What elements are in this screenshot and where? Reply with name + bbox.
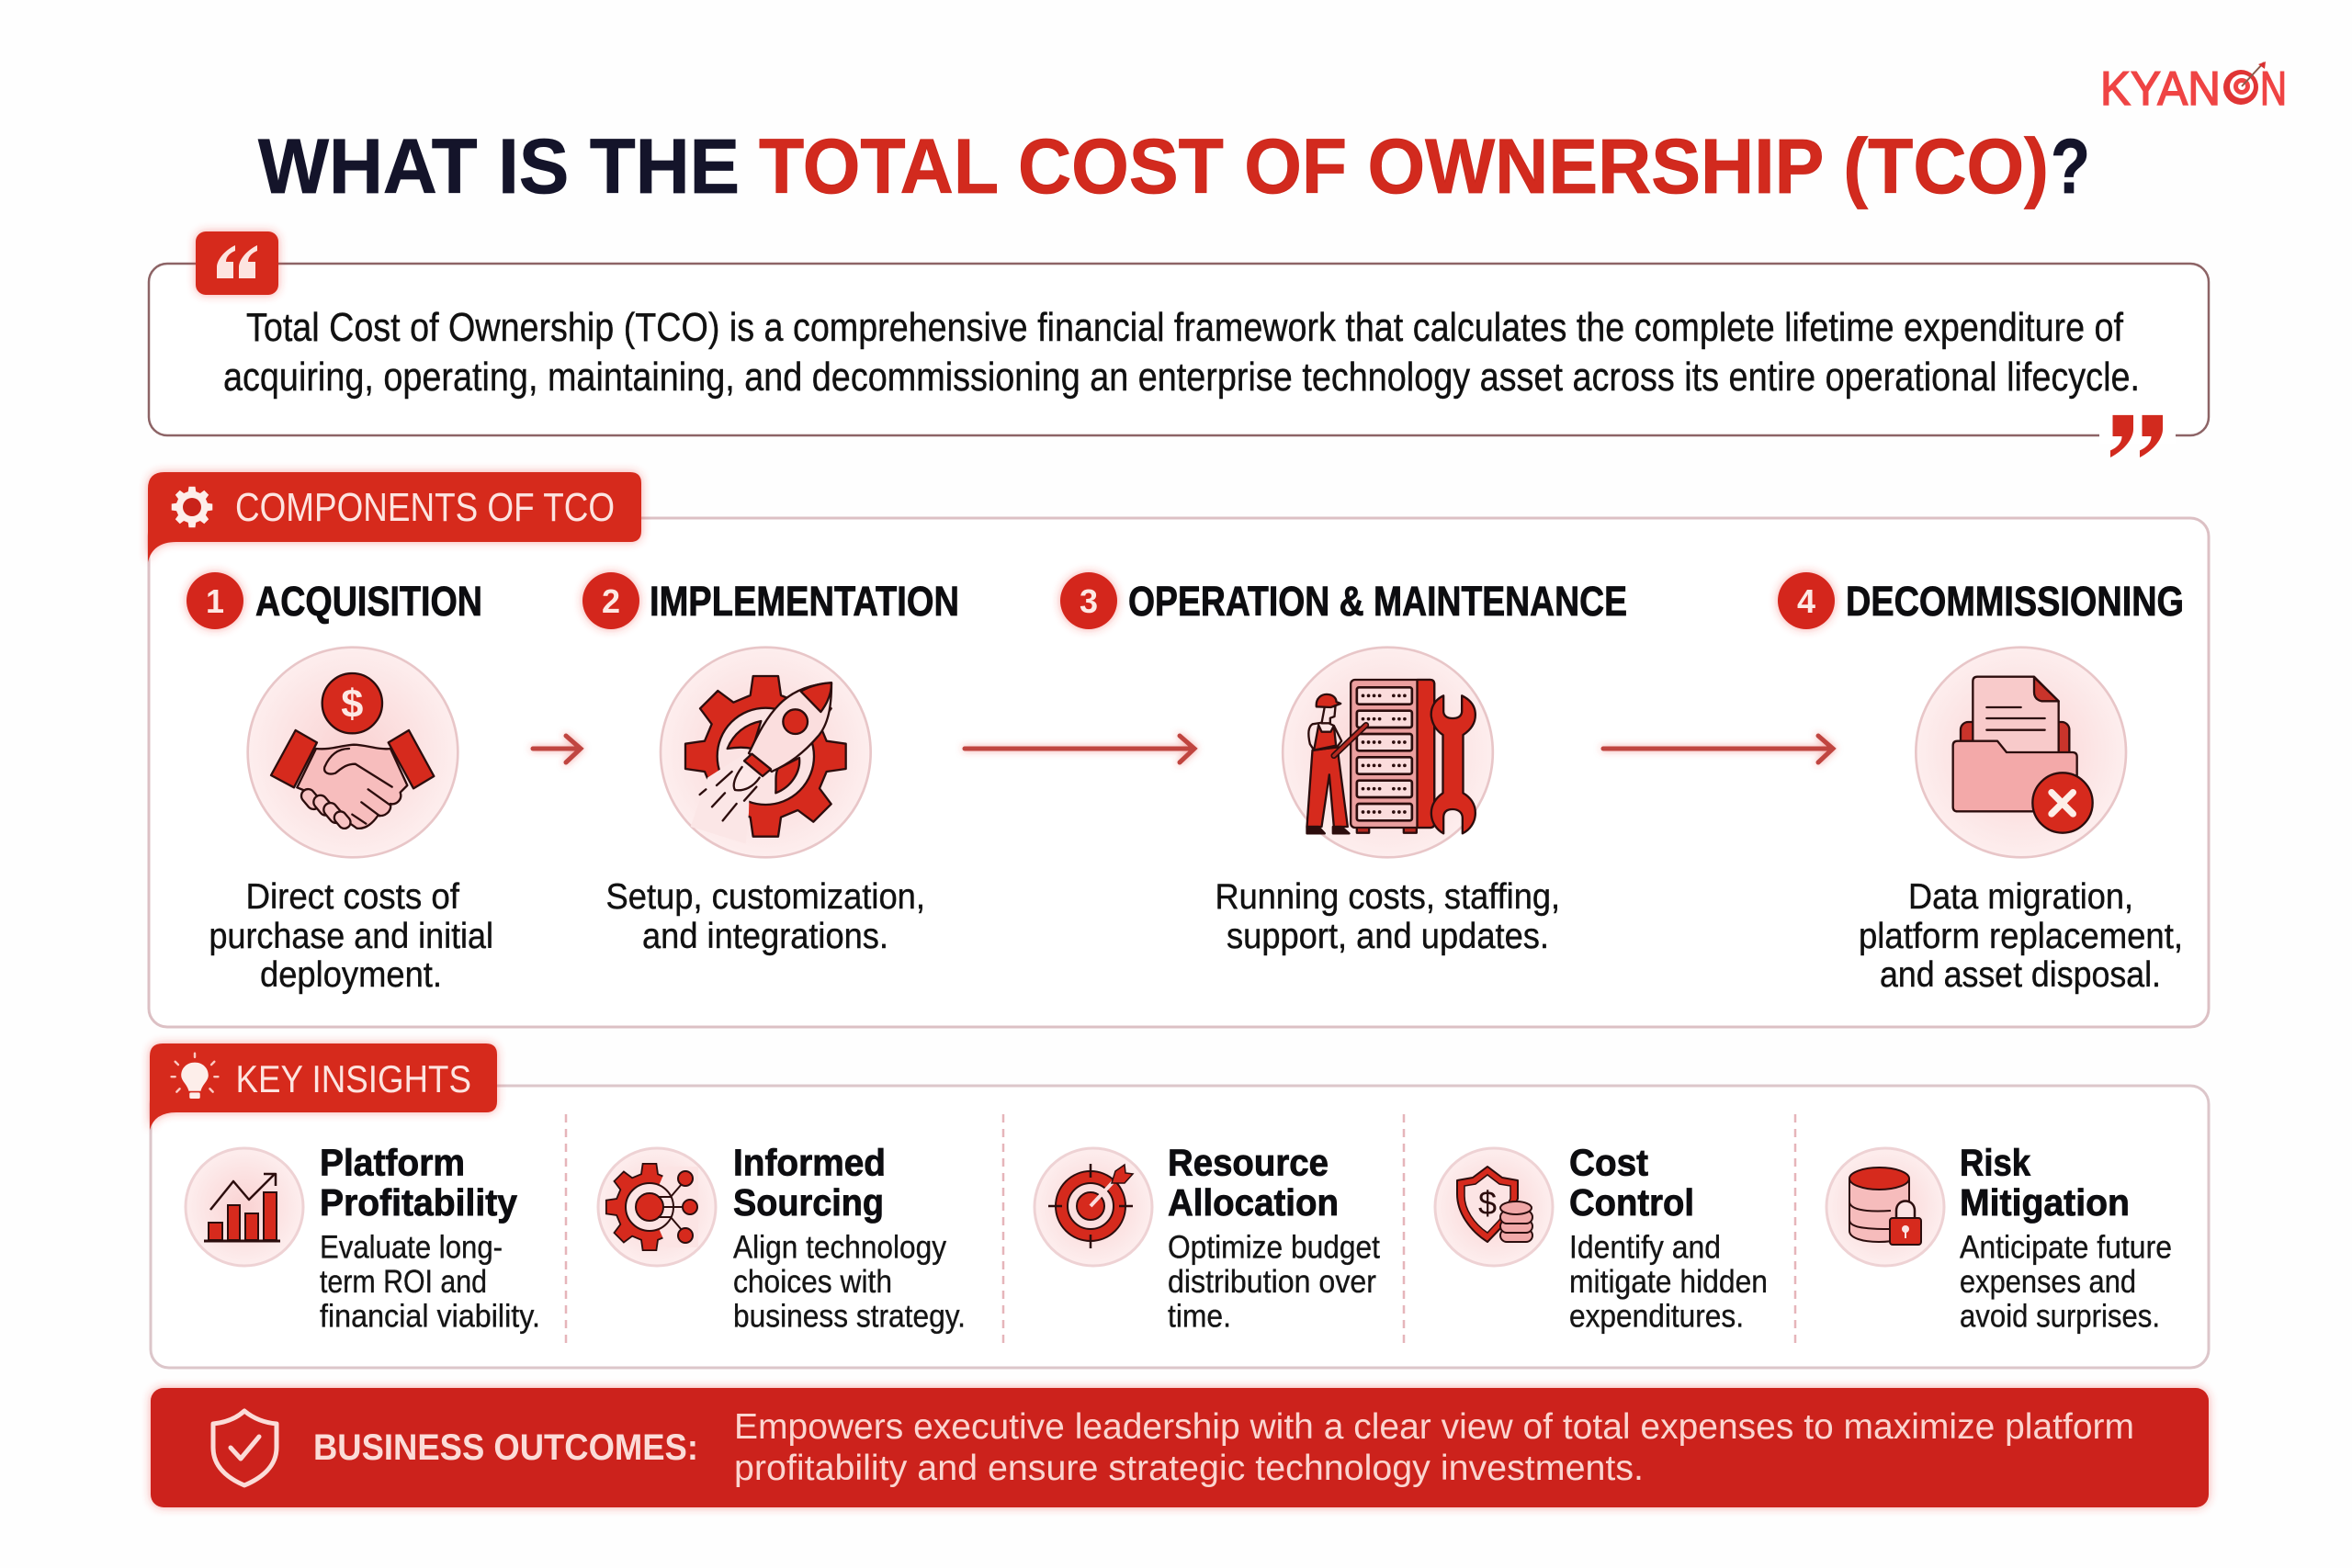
step 2: implementation bbox=[582, 572, 959, 956]
panel: key insights bbox=[150, 1043, 2209, 1368]
step 4: decommissioning: Data migration, bbox=[1908, 877, 2133, 917]
icon: target with arrow bbox=[1048, 1164, 1133, 1248]
insight: risk mitigation: Risk bbox=[1960, 1141, 2030, 1183]
icon: gear with network nodes bbox=[606, 1164, 698, 1250]
insight: informed sourcing bbox=[598, 1141, 966, 1334]
icon: shield with coins bbox=[1457, 1167, 1532, 1242]
icon: handshake bbox=[248, 648, 458, 857]
insight: resource allocation: Optimize budget bbox=[1168, 1229, 1380, 1266]
insight: platform profitability: Platform bbox=[320, 1141, 465, 1183]
insight: risk mitigation: Mitigation bbox=[1960, 1181, 2130, 1224]
icon: closing quote bbox=[2110, 415, 2163, 457]
step 1: acquisition: 1 bbox=[206, 582, 224, 620]
step 4: decommissioning: and asset disposal. bbox=[1880, 955, 2161, 995]
icon: opening quote tab bbox=[196, 231, 278, 295]
step 4: decommissioning bbox=[1778, 572, 2184, 995]
icon: database with padlock bbox=[1849, 1168, 1921, 1245]
definition text bbox=[223, 305, 2140, 400]
arrow: step 2 to step 3 bbox=[965, 736, 1194, 762]
insight: risk mitigation: avoid surprises. bbox=[1960, 1299, 2160, 1334]
step 2: implementation: 2 bbox=[602, 582, 620, 620]
insight: informed sourcing: Align technology bbox=[733, 1229, 946, 1266]
insight: risk mitigation: Anticipate future bbox=[1960, 1229, 2172, 1266]
logo: Kyanon: N bbox=[2260, 62, 2287, 116]
insight: informed sourcing: choices with bbox=[733, 1264, 892, 1300]
section tab: components: COMPONENTS OF TCO bbox=[235, 485, 615, 530]
step 3: operation and maintenance: 3 bbox=[1080, 582, 1098, 620]
step 3: operation and maintenance: OPERATION & MAINTENANCE bbox=[1128, 578, 1627, 625]
logo: Kyanon bbox=[2100, 62, 2287, 116]
arrow: step 1 to step 2 bbox=[533, 736, 581, 762]
step 3: operation and maintenance: support, and updates. bbox=[1227, 917, 1549, 956]
step 1: acquisition: Direct costs of bbox=[246, 877, 459, 917]
step 1: acquisition: purchase and initial bbox=[209, 917, 493, 956]
arrow: step 3 to step 4 bbox=[1603, 736, 1833, 762]
insight: informed sourcing: business strategy. bbox=[733, 1299, 966, 1334]
insight: platform profitability bbox=[186, 1141, 540, 1334]
step 3: operation and maintenance bbox=[1060, 572, 1627, 956]
insight: resource allocation: distribution over bbox=[1168, 1264, 1376, 1300]
icon: shield with check bbox=[213, 1411, 277, 1485]
insight: resource allocation: Allocation bbox=[1168, 1181, 1339, 1224]
title: ? bbox=[2051, 123, 2090, 209]
icon: light bulb bbox=[172, 1054, 218, 1099]
step 1: acquisition bbox=[187, 572, 493, 995]
icon: shield with coins: $ bbox=[1478, 1184, 1497, 1222]
logo: Kyanon: KYAN bbox=[2100, 62, 2221, 116]
insight: resource allocation bbox=[1035, 1141, 1380, 1334]
step 2: implementation: and integrations. bbox=[642, 917, 888, 956]
title: TOTAL COST OF OWNERSHIP (TCO) bbox=[759, 123, 2049, 209]
insight: cost control bbox=[1435, 1141, 1768, 1334]
insight: resource allocation: time. bbox=[1168, 1299, 1231, 1334]
section tab: key insights bbox=[150, 1043, 497, 1130]
icon: gear and rocket bbox=[661, 648, 871, 857]
banner: business outcomes: Empowers executive leadership with a clear view of total expenses to maximize platform bbox=[734, 1407, 2134, 1447]
step 1: acquisition: ACQUISITION bbox=[255, 578, 482, 625]
insight: cost control: Cost bbox=[1569, 1141, 1648, 1183]
insight: platform profitability: financial viability. bbox=[320, 1299, 540, 1334]
insight: platform profitability: term ROI and bbox=[320, 1264, 487, 1300]
panel: definition quote bbox=[149, 231, 2209, 457]
step 2: implementation: IMPLEMENTATION bbox=[650, 578, 959, 625]
insight: resource allocation: Resource bbox=[1168, 1141, 1329, 1183]
insight: risk mitigation bbox=[1826, 1141, 2172, 1334]
icon: rising bar chart bbox=[204, 1174, 280, 1241]
insight: informed sourcing: Sourcing bbox=[733, 1181, 884, 1224]
icon: technician, server rack and wrench bbox=[1283, 648, 1493, 857]
insight: cost control: expenditures. bbox=[1569, 1299, 1744, 1334]
step 4: decommissioning: DECOMMISSIONING bbox=[1846, 578, 2184, 625]
step 4: decommissioning: 4 bbox=[1797, 582, 1815, 620]
panel: components of TCO bbox=[148, 472, 2209, 1027]
insight: informed sourcing: Informed bbox=[733, 1141, 886, 1183]
title: WHAT IS THE bbox=[258, 123, 740, 209]
banner: business outcomes: BUSINESS OUTCOMES: bbox=[313, 1427, 698, 1468]
section tab: key insights: KEY INSIGHTS bbox=[235, 1057, 471, 1100]
step 2: implementation: Setup, customization, bbox=[606, 877, 925, 917]
insight: risk mitigation: expenses and bbox=[1960, 1264, 2136, 1300]
banner: business outcomes: profitability and ensure strategic technology investments. bbox=[734, 1449, 1644, 1488]
step 3: operation and maintenance: Running costs, staffing, bbox=[1215, 877, 1560, 917]
step 1: acquisition: deployment. bbox=[260, 955, 442, 995]
section tab: components bbox=[148, 472, 641, 562]
insight: cost control: mitigate hidden bbox=[1569, 1264, 1768, 1300]
step 4: decommissioning: platform replacement, bbox=[1859, 917, 2183, 956]
icon: folder with cross bbox=[1916, 648, 2126, 857]
banner: business outcomes bbox=[151, 1388, 2209, 1507]
insight: platform profitability: Profitability bbox=[320, 1181, 517, 1224]
insight: platform profitability: Evaluate long- bbox=[320, 1229, 503, 1266]
insight: cost control: Control bbox=[1569, 1181, 1694, 1224]
insight: cost control: Identify and bbox=[1569, 1229, 1721, 1266]
icon: handshake: $ bbox=[341, 682, 363, 727]
